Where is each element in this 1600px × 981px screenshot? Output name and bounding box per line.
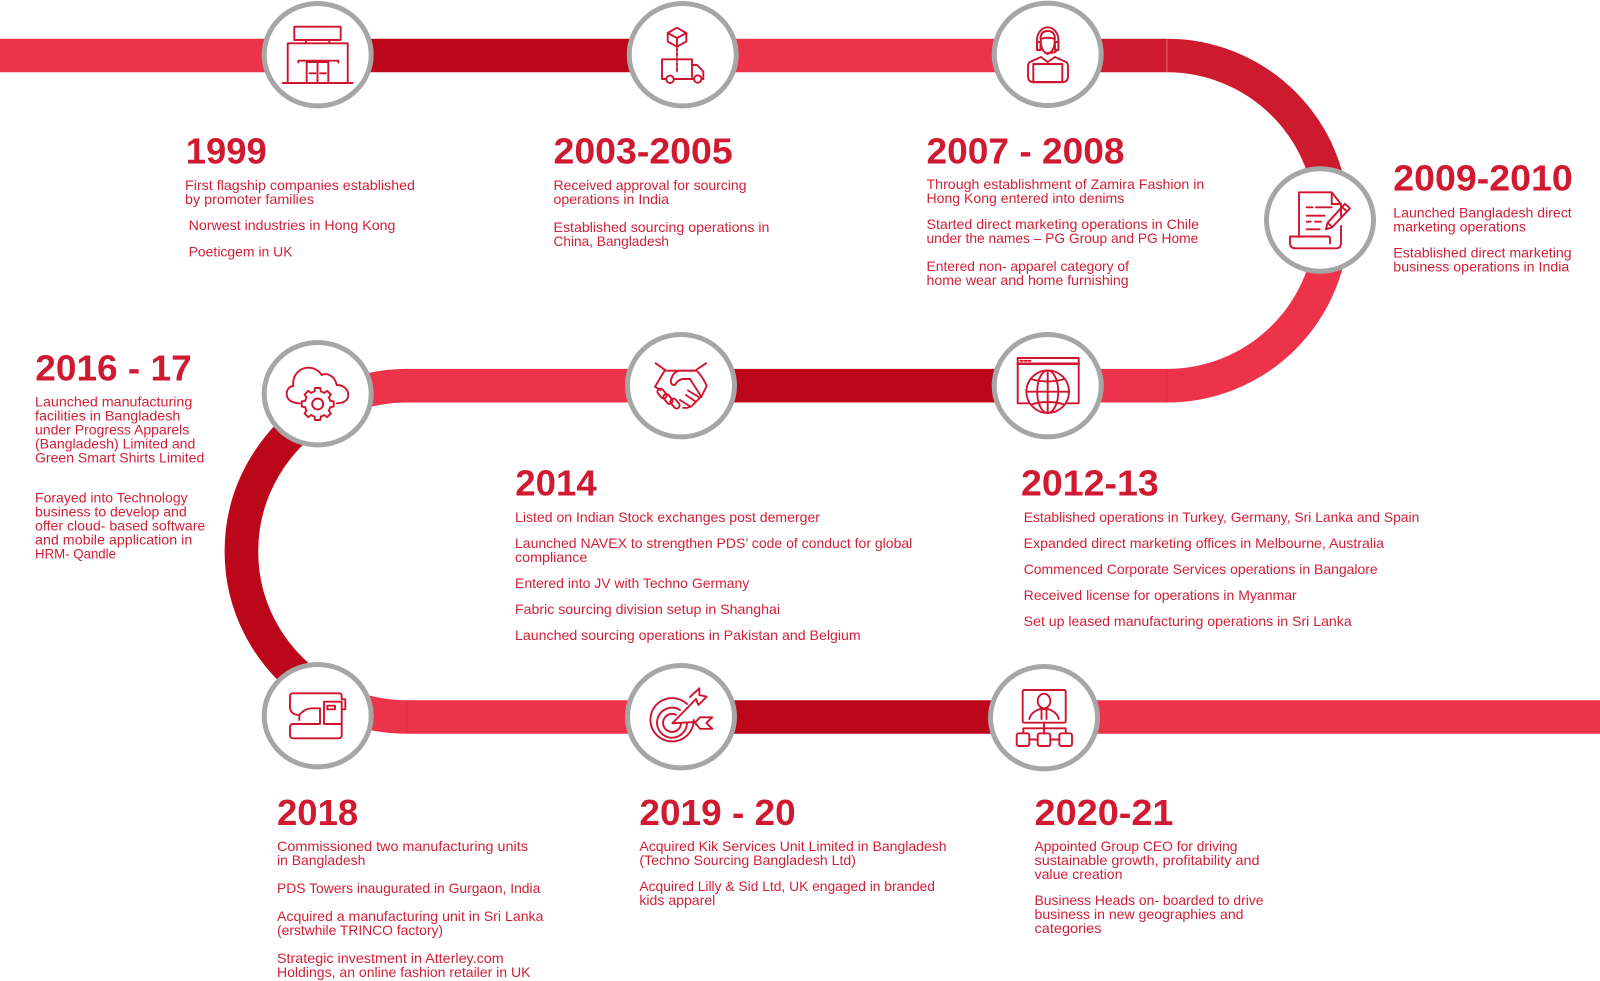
text: 2016 - 17 details: Forayed into Technology xyxy=(35,490,188,506)
text: 2012-13 details: Set up leased manufacturing operations in Sri Lanka xyxy=(1024,613,1352,629)
text: 2009-2010 details: marketing operations xyxy=(1393,218,1526,234)
text: 2014 details xyxy=(515,509,912,643)
icon: sewing machine xyxy=(264,664,371,767)
year 2012-13: 2012-13 xyxy=(1021,463,1159,504)
year 2019 - 20: 2019 - 20 xyxy=(639,792,796,833)
text: 2018 details: Holdings, an online fashion retailer in UK xyxy=(277,964,531,980)
text: 2020-21 details: categories xyxy=(1034,920,1102,936)
milestone 2019 - 20 xyxy=(628,666,947,908)
year 2020-21: 2020-21 xyxy=(1034,792,1174,833)
text: 2020-21 details: Business Heads on- boarded to drive xyxy=(1034,892,1264,908)
text: 2012-13 details: Commenced Corporate Services operations in Bangalore xyxy=(1024,561,1378,577)
text: 2018 details: Acquired a manufacturing unit in Sri Lanka xyxy=(277,908,544,924)
timeline track xyxy=(0,39,1600,734)
text: 1999 details: First flagship companies established xyxy=(185,177,415,193)
year 2007 - 2008: 2007 - 2008 xyxy=(926,130,1124,172)
text: 2014 details: Fabric sourcing division setup in Shanghai xyxy=(515,601,780,617)
year 2014: 2014 xyxy=(515,463,597,504)
milestone 2009-2010 xyxy=(1266,158,1573,274)
text: 2019 - 20 details: Acquired Lilly & Sid Ltd, UK engaged in branded xyxy=(639,878,935,894)
year 2003-2005: 2003-2005 xyxy=(554,130,733,171)
text: 2003-2005 details: Established sourcing operations in xyxy=(554,219,769,235)
text: 2007 - 2008 details: home wear and home furnishing xyxy=(926,272,1129,288)
text: 2018 details xyxy=(277,838,544,980)
icon: parcel and truck xyxy=(629,4,736,106)
text: 2020-21 details xyxy=(1034,838,1264,936)
year 1999: 1999 xyxy=(186,130,267,171)
text: 2019 - 20 details: kids apparel xyxy=(639,892,715,908)
icon: cloud and gear xyxy=(264,342,371,445)
text: 2018 details: PDS Towers inaugurated in Gurgaon, India xyxy=(277,880,541,896)
text: 2016 - 17 details xyxy=(35,394,206,562)
text: 2014 details: compliance xyxy=(515,549,588,565)
text: 2012-13 details: Expanded direct marketing offices in Melbourne, Australia xyxy=(1024,535,1384,551)
text: 2003-2005 details xyxy=(554,177,769,249)
text: 2020-21 details: value creation xyxy=(1034,866,1122,882)
milestone 1999 xyxy=(185,4,415,259)
text: 2018 details: Strategic investment in Atterley.com xyxy=(277,950,504,966)
icon: target and arrows xyxy=(628,666,734,768)
text: 2014 details: Launched sourcing operations in Pakistan and Belgium xyxy=(515,627,861,643)
milestone 2016 - 17 xyxy=(35,342,371,562)
text: 2007 - 2008 details: under the names – PG Group and PG Home xyxy=(926,230,1199,246)
text: 2020-21 details: business in new geographies and xyxy=(1034,906,1244,922)
milestone 2020-21 xyxy=(990,666,1264,936)
text: 2012-13 details xyxy=(1024,509,1419,629)
text: 2009-2010 details: Launched Bangladesh direct xyxy=(1393,204,1572,220)
icon: headset operator xyxy=(994,3,1101,106)
icon: browser window and globe xyxy=(994,334,1101,437)
text: 2007 - 2008 details: Hong Kong entered into denims xyxy=(926,190,1124,206)
icon: handshake xyxy=(628,334,734,437)
text: 1999 details: Poeticgem in UK xyxy=(189,243,293,259)
milestone 2007 - 2008 xyxy=(926,3,1204,288)
year 2016 - 17: 2016 - 17 xyxy=(35,348,192,389)
milestone 2012-13 xyxy=(994,334,1419,629)
text: 2014 details: Entered into JV with Techno Germany xyxy=(515,575,749,591)
icon: manager and org chart xyxy=(990,666,1098,769)
year 2009-2010: 2009-2010 xyxy=(1393,158,1573,199)
icon: storefront xyxy=(264,4,371,106)
text: 2020-21 details: sustainable growth, profitability and xyxy=(1034,852,1260,868)
text: 2009-2010 details: Established direct marketing xyxy=(1393,244,1572,260)
milestone 2003-2005 xyxy=(554,4,769,249)
text: 2007 - 2008 details: Entered non- apparel category of xyxy=(926,258,1129,274)
text: 2019 - 20 details: (Techno Sourcing Bangladesh Ltd) xyxy=(639,852,856,868)
text: 1999 details: Norwest industries in Hong Kong xyxy=(189,217,395,233)
text: 2016 - 17 details: Green Smart Shirts Limited xyxy=(35,450,204,466)
text: 2016 - 17 details: HRM- Qandle xyxy=(35,546,116,562)
milestone 2018 xyxy=(264,664,544,980)
text: 1999 details: by promoter families xyxy=(185,191,314,207)
text: 2007 - 2008 details: Through establishment of Zamira Fashion in xyxy=(926,176,1204,192)
text: 2019 - 20 details: Acquired Kik Services Unit Limited in Bangladesh xyxy=(639,838,947,854)
text: 2003-2005 details: operations in India xyxy=(554,191,669,207)
text: 2016 - 17 details: offer cloud- based software xyxy=(35,518,206,534)
milestone 2014 xyxy=(515,334,912,643)
text: 2016 - 17 details: and mobile application in xyxy=(35,532,192,548)
year 2018: 2018 xyxy=(277,792,358,833)
text: 2014 details: Listed on Indian Stock exchanges post demerger xyxy=(515,509,820,525)
text: 2016 - 17 details: business to develop and xyxy=(35,504,187,520)
text: 2009-2010 details xyxy=(1393,204,1572,274)
text: 2020-21 details: Appointed Group CEO for driving xyxy=(1034,838,1238,854)
text: 2012-13 details: Received license for operations in Myanmar xyxy=(1024,587,1297,603)
text: 2018 details: in Bangladesh xyxy=(277,852,365,868)
icon: document and pen xyxy=(1266,169,1374,271)
text: 2007 - 2008 details: Started direct marketing operations in Chile xyxy=(926,216,1199,232)
text: 2014 details: Launched NAVEX to strengthen PDS’ code of conduct for global xyxy=(515,535,912,551)
text: 2016 - 17 details: (Bangladesh) Limited and xyxy=(35,436,195,452)
text: 2003-2005 details: Received approval for sourcing xyxy=(554,177,746,193)
text: 2016 - 17 details: facilities in Bangladesh xyxy=(35,408,180,424)
text: 2009-2010 details: business operations in India xyxy=(1393,258,1570,274)
text: 2019 - 20 details xyxy=(639,838,947,908)
text: 2018 details: (erstwhile TRINCO factory) xyxy=(277,922,443,938)
text: 1999 details xyxy=(185,177,415,259)
text: 2003-2005 details: China, Bangladesh xyxy=(554,233,669,249)
text: 2012-13 details: Established operations in Turkey, Germany, Sri Lanka and Spain xyxy=(1024,509,1419,525)
text: 2018 details: Commissioned two manufacturing units xyxy=(277,838,528,854)
text: 2007 - 2008 details xyxy=(926,176,1204,288)
text: 2016 - 17 details: under Progress Apparels xyxy=(35,422,189,438)
text: 2016 - 17 details: Launched manufacturing xyxy=(35,394,192,410)
